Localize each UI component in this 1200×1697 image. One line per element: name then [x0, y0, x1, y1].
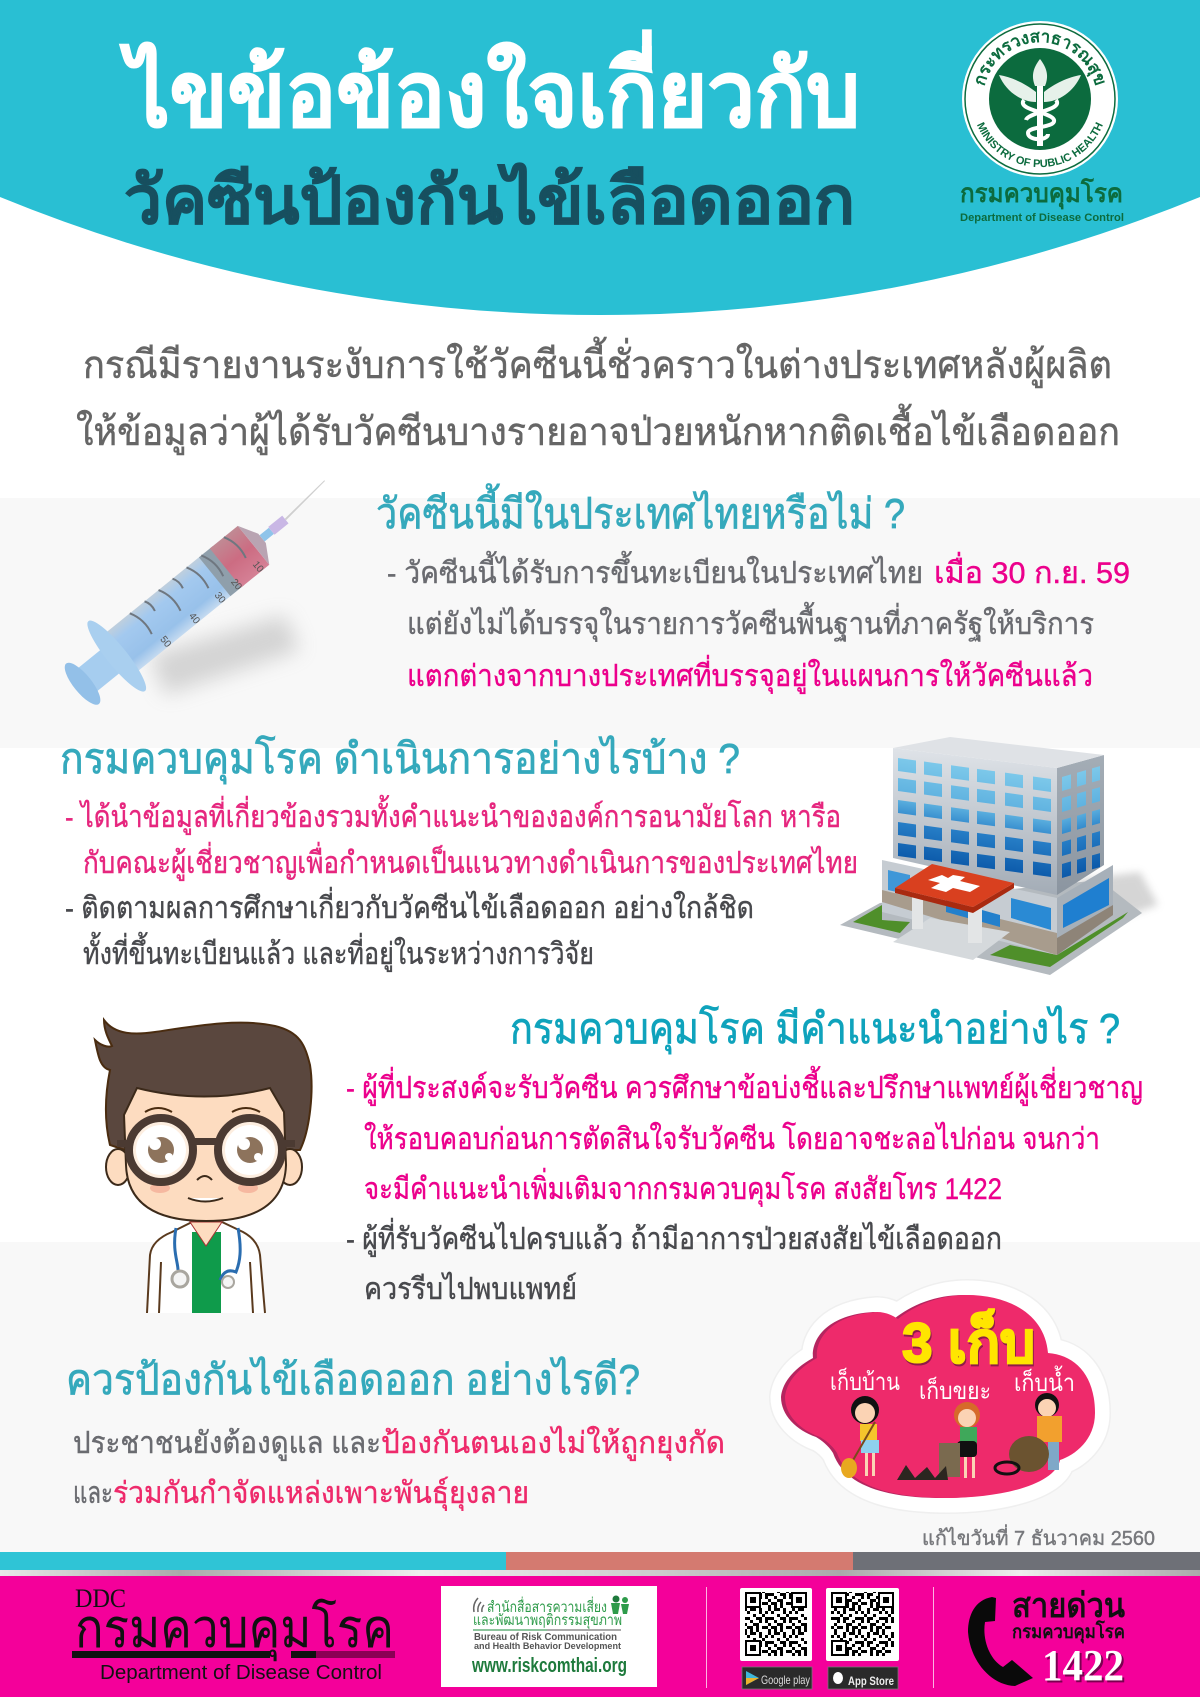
body text line 3 highlighted: แตกต่างจากบางประเทศที่บรรจุอยู่ในแผนการให้วัคซีนแล้ว — [407, 655, 1093, 695]
footer: iOS QR code — [826, 1588, 899, 1661]
icon: 3 keep campaign badge: เก็บขยะ — [919, 1376, 991, 1405]
icon: 3 keep campaign badge — [781, 1295, 1095, 1498]
intro text: ให้ข้อมูลว่าผู้ได้รับวัคซีนบางรายอาจป่วยหนักหากติดเชื้อไข้เลือดออก — [76, 403, 1120, 455]
badge: app store: App Store — [848, 1674, 894, 1688]
body text line 1: - วัคซีนนี้ได้รับการขึ้นทะเบียนในประเทศไทย — [387, 551, 923, 590]
icon: 3 keep campaign badge: เก็บบ้าน — [830, 1367, 900, 1396]
footer: risk communication logo: Bureau of Risk Communication — [474, 1632, 617, 1643]
header: teal curved banner — [0, 0, 1200, 315]
footer: department wordmark: DDC — [75, 1584, 126, 1613]
icon: 3 keep campaign badge: 3 เก็บ — [903, 1310, 1036, 1376]
icon: cartoon doctor — [95, 1020, 312, 1313]
icon: syringe: 10 — [250, 559, 266, 575]
logo text: department name — [960, 177, 1124, 224]
revision date: แก้ไขวันที่ 7 ธันวาคม 2560 — [922, 1524, 1155, 1550]
footer divider — [706, 1587, 707, 1688]
prevention line 1 — [73, 1425, 725, 1462]
section: prevention — [66, 1356, 725, 1512]
advice 1 line 2: ให้รอบคอบก่อนการตัดสินใจรับวัคซีน โดยอาจชะลอไปก่อน จนกว่า — [364, 1121, 1100, 1156]
icon: telephone handset — [968, 1597, 1033, 1686]
heading: what is the department doing: กรมควบคุมโรค ดำเนินการอย่างไรบ้าง ? — [60, 734, 740, 785]
action 2 line 2: ทั้งที่ขึ้นทะเบียนแล้ว และที่อยู่ในระหว่างการวิจัย — [83, 932, 594, 972]
icon: hospital building — [840, 737, 1158, 975]
icon: syringe: 30 — [212, 590, 228, 606]
footer: department wordmark: Department of Disease Control — [100, 1662, 382, 1684]
section: department actions — [60, 734, 858, 972]
footer: risk communication logo — [441, 1586, 657, 1687]
heading: is vaccine in Thailand: วัคซีนนี้มีในประเทศไทยหรือไม่ ? — [376, 483, 905, 537]
icon: syringe: 50 — [157, 634, 173, 650]
panel: light band behind vaccine section — [0, 498, 1200, 748]
icon: 3 keep campaign badge: เก็บน้ำ — [1014, 1365, 1075, 1397]
footer: hotline text — [1012, 1587, 1126, 1692]
icon: syringe — [47, 450, 356, 724]
logo text: department name: กรมควบคุมโรค — [960, 177, 1123, 210]
icon: syringe: 40 — [186, 611, 202, 627]
advice 2 line 1: - ผู้ที่รับวัคซีนไปครบแล้ว ถ้ามีอาการป่วยสงสัยไข้เลือดออก — [346, 1218, 1002, 1257]
body text line 2: แต่ยังไม่ได้บรรจุในรายการวัคซีนพื้นฐานที่ภาครัฐให้บริการ — [407, 602, 1094, 643]
section: department advice — [346, 1004, 1143, 1306]
subtitle: วัคซีนป้องกันไข้เลือดออก — [124, 162, 855, 237]
intro text — [76, 336, 1120, 455]
prevention line 2: และ — [73, 1477, 113, 1510]
advice 2 line 2: ควรรีบไปพบแพทย์ — [364, 1271, 577, 1306]
heading: prevention: ควรป้องกันไข้เลือดออก อย่างไรดี? — [66, 1356, 640, 1403]
panel: light band behind prevention section — [0, 1242, 1200, 1552]
footer: department wordmark: กรมควบคุมโรค — [75, 1598, 394, 1662]
icon: ministry of public health seal: MINISTRY OF PUBLIC HEALTH — [977, 122, 1103, 168]
prevention line 2: ร่วมกันกำจัดแหล่งเพาะพันธุ์ยุงลาย — [113, 1476, 529, 1512]
footer: pink bar — [0, 1576, 1200, 1697]
action 1 line 2: กับคณะผู้เชี่ยวชาญเพื่อกำหนดเป็นแนวทางดำเนินการของประเทศไทย — [83, 842, 858, 881]
footer: department wordmark — [72, 1584, 395, 1684]
footer: risk communication logo: และพัฒนาพฤติกรรมสุขภาพ — [473, 1612, 622, 1630]
body text line 1: เมื่อ 30 ก.ย. 59 — [934, 552, 1130, 590]
footer: risk communication logo: and Health Behavior Development — [474, 1641, 622, 1652]
badge: app store — [828, 1667, 898, 1689]
title: ไขข้อข้องใจเกี่ยวกับ — [119, 29, 860, 146]
prevention line 1: ป้องกันตนเองไม่ให้ถูกยุงกัด — [381, 1425, 725, 1462]
icon: ministry of public health seal: กระทรวงสาธารณสุข — [976, 32, 1105, 86]
logo text: department name: Department of Disease Control — [960, 212, 1124, 224]
footer: hotline text: สายด่วน — [1012, 1587, 1125, 1625]
footer: hotline text: กรมควบคุมโรค — [1012, 1620, 1125, 1644]
footer divider — [933, 1587, 934, 1688]
tricolor stripe — [0, 1552, 1200, 1576]
advice 1 line 3: จะมีคำแนะนำเพิ่มเติมจากกรมควบคุมโรค สงสัยโทร 1422 — [364, 1168, 1002, 1208]
footer: android QR code — [740, 1588, 812, 1661]
intro text: กรณีมีรายงานระงับการใช้วัคซีนนี้ชั่วคราวในต่างประเทศหลังผู้ผลิต — [83, 336, 1112, 388]
icon: 3 keep campaign badge: 3 เก็บ — [902, 1308, 1035, 1374]
badge: google play — [742, 1667, 812, 1689]
action 2 line 1: - ติดตามผลการศึกษาเกี่ยวกับวัคซีนไข้เลือดออก อย่างใกล้ชิด — [65, 887, 754, 925]
action 1 line 1: - ได้นำข้อมูลที่เกี่ยวข้องรวมทั้งคำแนะนำขององค์การอนามัยโลก หารือ — [65, 795, 841, 835]
footer: hotline text: 1422 — [1042, 1641, 1124, 1690]
prevention line 1: ประชาชนยังต้องดูแล และ — [73, 1427, 381, 1461]
heading: advice: กรมควบคุมโรค มีคำแนะนำอย่างไร ? — [510, 1004, 1120, 1055]
icon: syringe: 20 — [228, 577, 244, 593]
section: vaccine availability — [376, 483, 1130, 695]
badge: google play: Google play — [761, 1673, 810, 1687]
icon: ministry of public health seal — [962, 21, 1118, 177]
body text line 1 — [387, 551, 1130, 590]
footer: risk communication logo: www.riskcomthai.org — [471, 1655, 627, 1677]
footer: hotline text: 1422 — [1044, 1643, 1126, 1692]
footer: risk communication logo: สำนักสื่อสารความเสี่ยง — [487, 1596, 607, 1616]
